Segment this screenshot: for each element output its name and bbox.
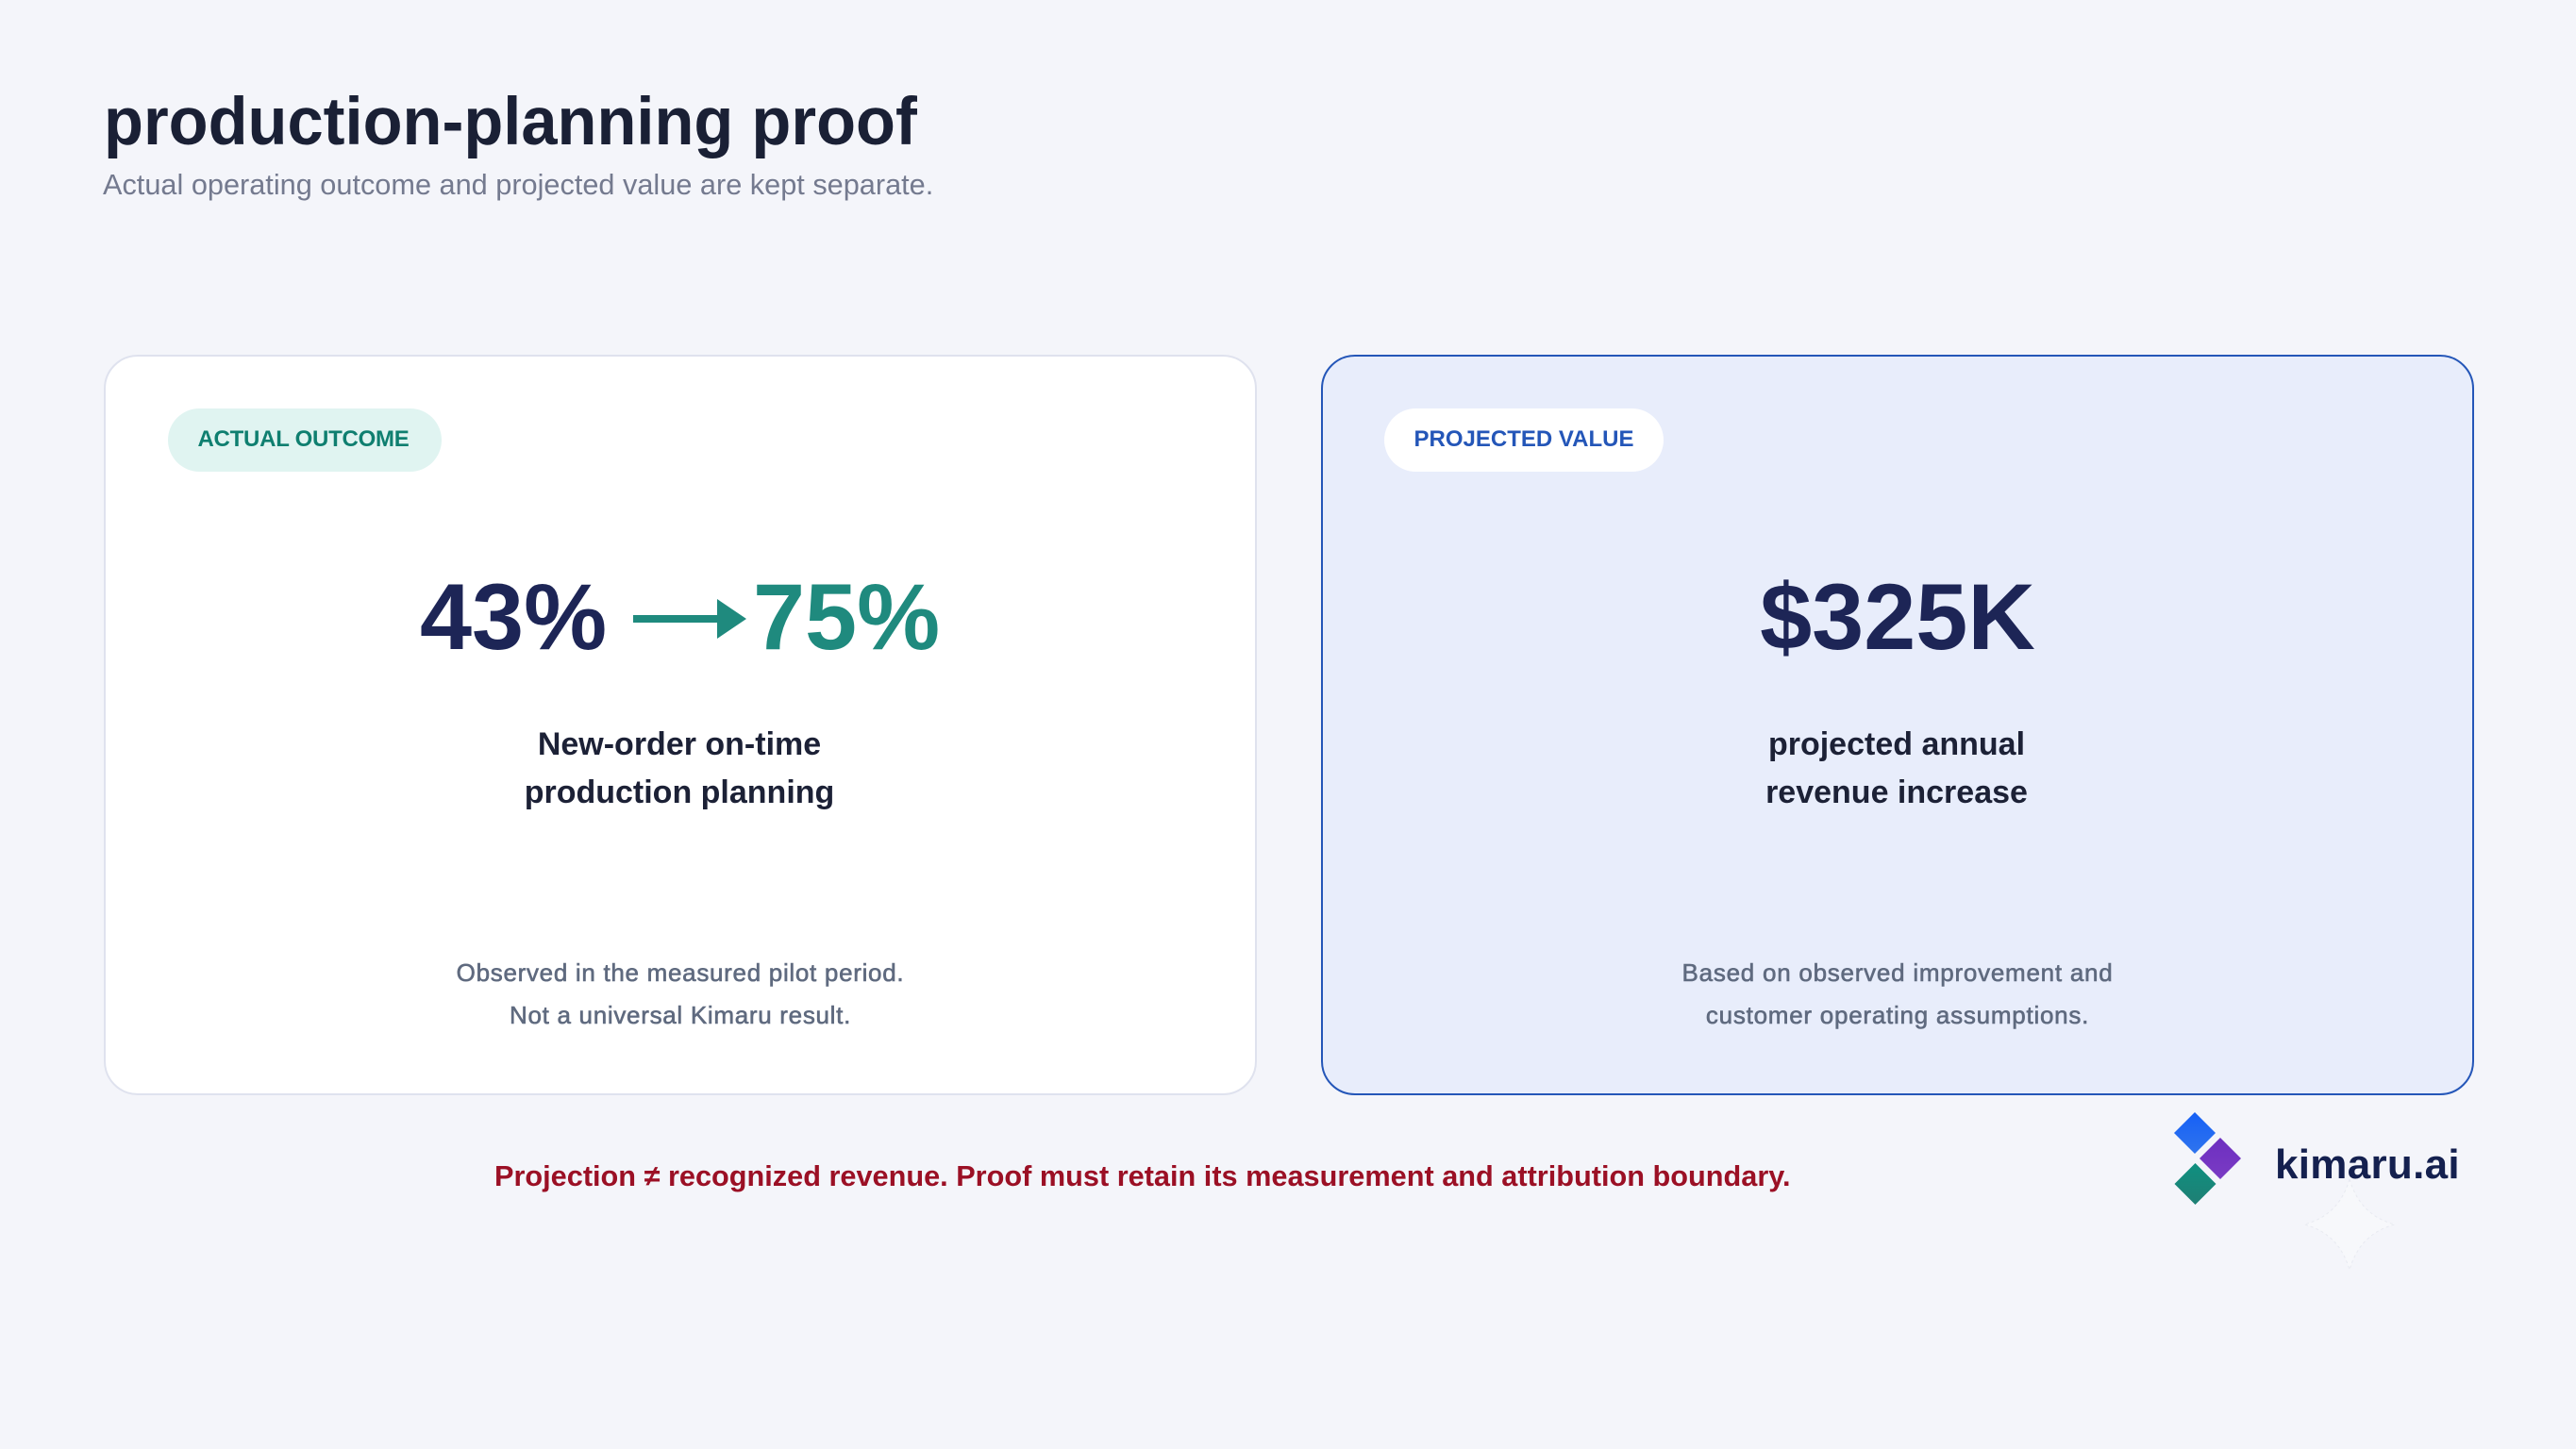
icon: kimaru logo [2174, 1112, 2241, 1205]
metric description [1765, 726, 2028, 810]
caveat note: Not a universal Kimaru result. [510, 1000, 851, 1028]
brand name: kimaru.ai [2275, 1141, 2460, 1188]
metric description [525, 726, 834, 810]
metric: 43 to 75 percent [420, 564, 940, 669]
badge: projected value [1384, 408, 1664, 472]
panel: projected value [1321, 355, 2474, 1095]
metric description: production planning [525, 774, 834, 810]
metric description: revenue increase [1765, 774, 2028, 810]
badge: actual outcome [168, 408, 442, 472]
caveat note [1682, 958, 2113, 1029]
value: 75%: 75% [753, 564, 940, 669]
value: $325K: $325K [1760, 564, 2035, 669]
badge: actual outcome: ACTUAL OUTCOME [197, 426, 410, 452]
metric description: New-order on-time [538, 726, 821, 762]
metric description: projected annual [1768, 726, 2025, 762]
title: production-planning proof [104, 85, 917, 159]
caveat note: Observed in the measured pilot period. [457, 958, 904, 987]
icon: faint sparkle [2305, 1179, 2394, 1268]
subtitle: Actual operating outcome and projected value are kept separate. [103, 168, 933, 201]
value: 43%: 43% [420, 564, 607, 669]
icon: arrow [633, 599, 746, 639]
panel: actual outcome [104, 355, 1257, 1095]
badge: projected value: PROJECTED VALUE [1414, 426, 1633, 452]
caveat note: customer operating assumptions. [1706, 1000, 2089, 1028]
caveat note [457, 958, 904, 1028]
boundary warning: Projection ≠ recognized revenue. Proof must retain its measurement and attribution boundary. [494, 1159, 1791, 1192]
caveat note: Based on observed improvement and [1682, 958, 2113, 987]
